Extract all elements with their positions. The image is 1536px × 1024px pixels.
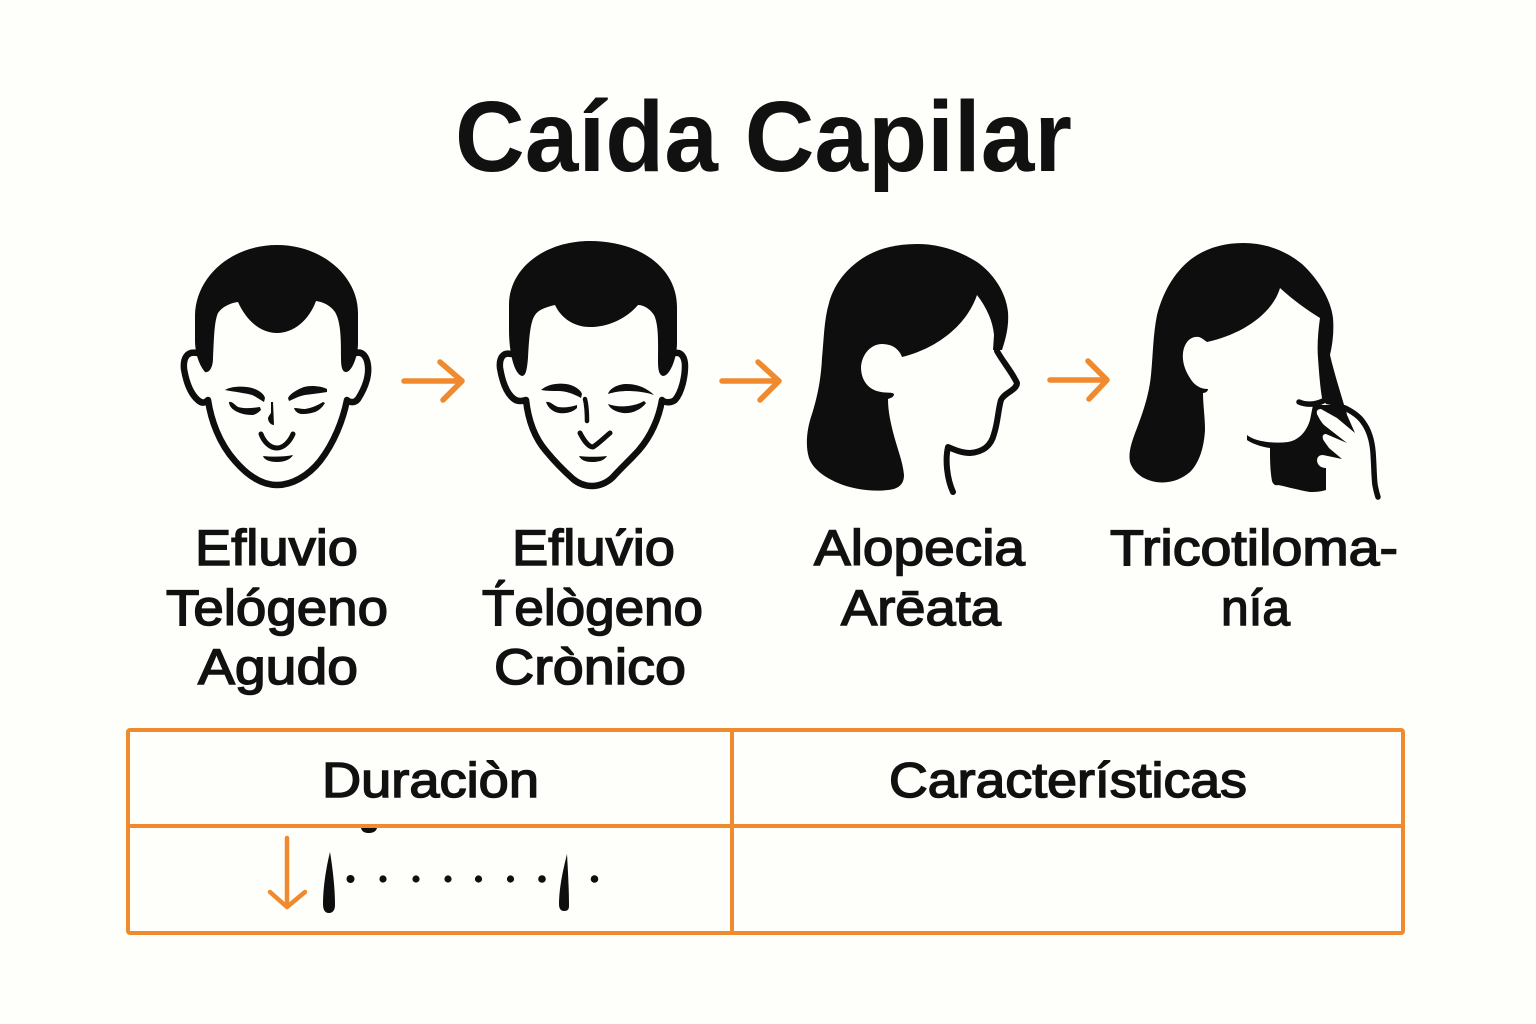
label: Alopecia Areata: Alopecia xyxy=(814,520,1025,576)
nose xyxy=(268,402,274,425)
icon: down arrow xyxy=(270,838,305,907)
title: Caída Capilar xyxy=(455,81,1072,193)
table xyxy=(128,730,1403,933)
label: Tricotilomanía: Tricotiloma- xyxy=(1110,520,1398,576)
arrow 3 xyxy=(1050,361,1107,399)
right brow and eye xyxy=(288,386,327,414)
right brow and eye xyxy=(608,384,654,413)
icon: alopecia areata profile xyxy=(807,244,1017,492)
label: Tricotilomanía: nía xyxy=(1221,580,1290,636)
mouth xyxy=(263,455,293,462)
mouth xyxy=(579,456,607,462)
hand outline xyxy=(1345,408,1378,497)
face profile line xyxy=(947,351,1017,492)
label: Efluvio Telógeno Crónico xyxy=(482,520,703,695)
hair strand timeline xyxy=(323,852,598,913)
label: Efluvio Telógeno Crónico: T́elògeno xyxy=(482,580,703,636)
label: Efluvio Telógeno Crónico: Efluv́io xyxy=(512,520,675,576)
lips and nose line xyxy=(1299,401,1323,404)
clipped mark under header line xyxy=(361,828,377,833)
label: Efluvio Telógeno Agudo: Telógeno xyxy=(166,580,388,636)
label: Tricotilomanía xyxy=(1110,520,1398,636)
label: Alopecia Areata: Arēata xyxy=(841,580,1001,636)
arrow 2 xyxy=(722,362,779,400)
column heading: Duración: Duraciòn xyxy=(322,754,539,808)
label: Efluvio Telógeno Agudo: Efluvio xyxy=(195,520,358,576)
label: Alopecia Areata xyxy=(814,520,1025,636)
column heading: Características: Características xyxy=(889,754,1247,808)
label: Efluvio Telógeno Agudo xyxy=(166,520,388,695)
icon: chronic telogen effluvium head xyxy=(500,241,685,486)
icon: acute telogen effluvium head xyxy=(184,245,368,485)
label: Efluvio Telógeno Agudo: Agudo xyxy=(198,639,358,695)
icon: trichotillomania profile with hand xyxy=(1129,243,1378,497)
chin, hair and fingers xyxy=(1247,405,1355,492)
left brow and eye xyxy=(225,387,265,415)
nose xyxy=(585,399,587,421)
label: Efluvio Telógeno Crónico: Crònico xyxy=(494,639,686,695)
left brow and eye xyxy=(541,384,582,413)
arrow 1 xyxy=(404,362,462,400)
